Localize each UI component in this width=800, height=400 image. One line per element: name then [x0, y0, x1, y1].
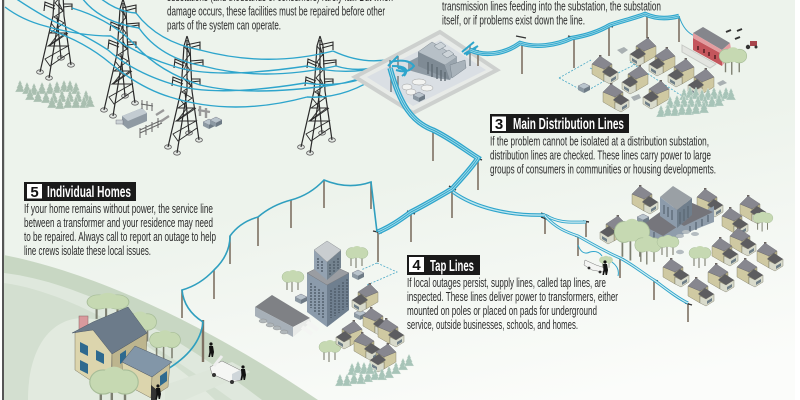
heading: 3 Main Distribution Lines: 3	[495, 116, 503, 133]
tractor and cows	[726, 29, 758, 49]
pine trees: upper left	[15, 80, 95, 109]
text: tap lines: service, outside businesses, schools, and homes.	[407, 318, 578, 332]
utility crew and bucket truck	[155, 342, 246, 399]
tap-line service truck	[584, 260, 608, 275]
text: tap lines: inspected. These lines deliver power to transformers, either	[407, 290, 618, 304]
distribution poles	[182, 14, 688, 362]
transmission towers	[37, 0, 336, 155]
pole cross arms	[373, 14, 692, 305]
step 2 text (top left): damage occurs, these facilities must be repaired before other	[167, 4, 385, 18]
pine trees: office area	[335, 354, 414, 386]
pine trees: farm	[656, 86, 736, 117]
substation	[355, 32, 497, 113]
heading: 3 Main Distribution Lines	[490, 114, 629, 133]
green hill with home	[4, 255, 318, 400]
heading: 4 Tap Lines: Tap Lines	[430, 258, 474, 275]
heading: 3 Main Distribution Lines: Main Distribution Lines	[513, 116, 624, 133]
text: individual homes: If your home remains without power, the service line	[24, 202, 213, 216]
generating station	[116, 100, 222, 138]
text: tap lines: mounted on poles or placed on pads for underground	[407, 304, 597, 318]
home	[72, 293, 180, 400]
text: tap lines	[407, 276, 618, 332]
transmission lines	[5, 0, 397, 107]
service line to home	[166, 180, 377, 370]
barn and farm	[682, 27, 758, 75]
step 2 text (top right)	[442, 0, 661, 28]
text: individual homes: line crews isolate these local issues.	[24, 244, 151, 258]
step 2 text (top right): itself, or if problems exist down the line.	[442, 14, 585, 28]
text: individual homes	[24, 202, 216, 258]
step 2 text (top left)	[167, 0, 393, 32]
main distribution lines	[378, 14, 679, 232]
neighborhood and apartment buildings	[599, 185, 783, 306]
heading: 5 Individual Homes	[24, 182, 136, 201]
text: main distribution lines	[490, 134, 716, 176]
text: individual homes: to be repaired. Always call to report an outage to help	[24, 230, 216, 244]
farm neighborhood	[559, 37, 727, 112]
wires into substation	[388, 42, 478, 76]
office tower and warehouse	[255, 241, 404, 372]
tap lines	[545, 16, 695, 303]
heading: 5 Individual Homes: 5	[30, 184, 39, 201]
heading: 4 Tap Lines: 4	[412, 257, 421, 274]
text: individual homes: between a transformer and your residence may need	[24, 216, 213, 230]
text: tap lines: If local outages persist, supply lines, called tap lines, are	[407, 276, 606, 290]
heading: 4 Tap Lines	[407, 255, 480, 275]
heading: 5 Individual Homes: Individual Homes	[47, 184, 131, 201]
step 2 text (top left): parts of the system can operate.	[167, 18, 281, 32]
